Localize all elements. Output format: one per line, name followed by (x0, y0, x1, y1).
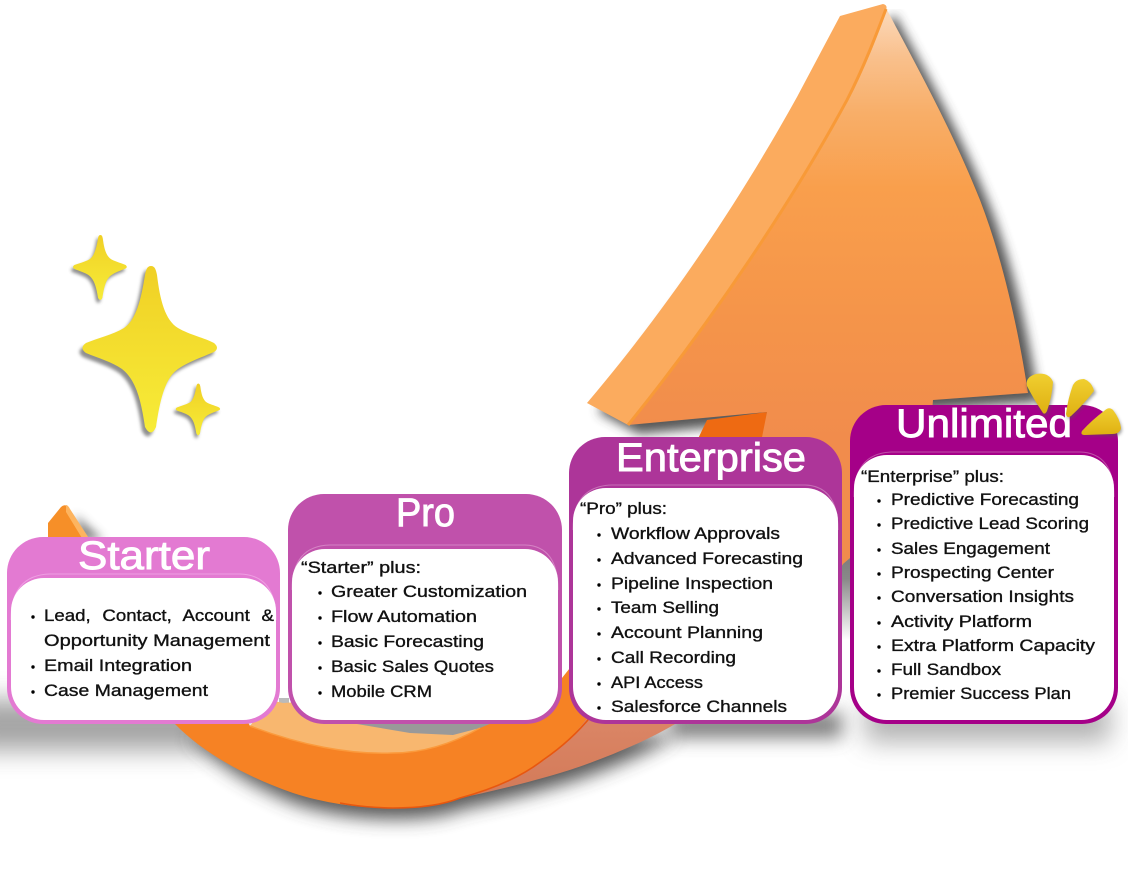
list: Starter features: Opportunity Management (44, 631, 270, 650)
burst right (1081, 408, 1121, 435)
list: Starter features: Case Management (44, 681, 208, 700)
heading: Enterprise: Enterprise (616, 436, 806, 480)
list: Enterprise features: Team Selling (611, 598, 719, 617)
panel: Pro (288, 491, 562, 724)
arrow stem inner shade (695, 412, 767, 445)
list: Enterprise features: Pipeline Inspection (611, 574, 773, 593)
burst left (1027, 374, 1053, 414)
list: Starter features: Email Integration (44, 656, 192, 675)
list: Enterprise features: “Pro” plus: (580, 499, 667, 518)
list: Pro features: Basic Sales Quotes (331, 657, 494, 676)
small sparkle top (73, 235, 127, 300)
small sparkle bottom (176, 384, 220, 435)
list: Unlimited features (861, 467, 1096, 703)
list: Enterprise features: Salesforce Channels (611, 697, 787, 716)
list: Enterprise features: Account Planning (611, 623, 763, 642)
list: Starter features: Lead, Contact, Account & (44, 606, 275, 625)
list: Unlimited features: “Enterprise” plus: (861, 467, 1004, 486)
list: Starter features (31, 606, 275, 700)
arrow band underside (455, 600, 700, 799)
burst middle (1066, 379, 1094, 417)
arrow band lower edge (340, 715, 592, 808)
sparkles (71, 235, 220, 438)
list: Unlimited features: Activity Platform (891, 612, 1032, 631)
list: Unlimited features: Conversation Insights (891, 587, 1074, 606)
list: Unlimited features: Prospecting Center (891, 563, 1054, 582)
arrow band inner surface (250, 700, 480, 753)
list: Enterprise features: Advanced Forecasting (611, 549, 803, 568)
heading: Pro: Pro (396, 491, 455, 535)
burst shadows (1027, 376, 1122, 436)
arrow tail highlight (66, 505, 92, 543)
arrow tail tip (48, 505, 92, 545)
arrow band ridge (250, 726, 480, 753)
list: Pro features: Basic Forecasting (331, 632, 484, 651)
list: Pro features: Mobile CRM (331, 682, 432, 701)
list: Enterprise features: API Access (611, 673, 703, 692)
arrow head ridge (628, 9, 886, 425)
panel: Starter (7, 534, 280, 724)
arrow (48, 4, 1028, 808)
list: Unlimited features: Extra Platform Capacity (891, 636, 1096, 655)
list: Pro features: “Starter” plus: (301, 558, 421, 577)
panel: Unlimited (850, 402, 1118, 724)
list: Unlimited features: Full Sandbox (891, 660, 1002, 679)
list: Enterprise features: Call Recording (611, 648, 736, 667)
list: Pro features (301, 558, 527, 701)
icon: yellow burst accents (1027, 374, 1122, 436)
list: Unlimited features: Predictive Forecasting (891, 490, 1079, 509)
panel: Enterprise (569, 436, 842, 724)
list: Enterprise features: Workflow Approvals (611, 524, 780, 543)
arrow head face and stem (628, 6, 1028, 640)
sparkle shadows (71, 238, 218, 438)
list: Pro features: Flow Automation (331, 607, 477, 626)
heading: Unlimited: Unlimited (896, 402, 1072, 446)
heading: Starter: Starter (78, 534, 210, 578)
arrow band front (175, 500, 720, 808)
list: Pro features: Greater Customization (331, 582, 527, 601)
large sparkle (82, 266, 217, 432)
list: Unlimited features: Predictive Lead Scoring (891, 514, 1089, 533)
list: Unlimited features: Sales Engagement (891, 539, 1050, 558)
list: Unlimited features: Premier Success Plan (891, 684, 1071, 703)
arrow head cast shadow (598, 14, 1039, 434)
list: Enterprise features (580, 499, 803, 716)
arrow head bevel (587, 4, 887, 425)
